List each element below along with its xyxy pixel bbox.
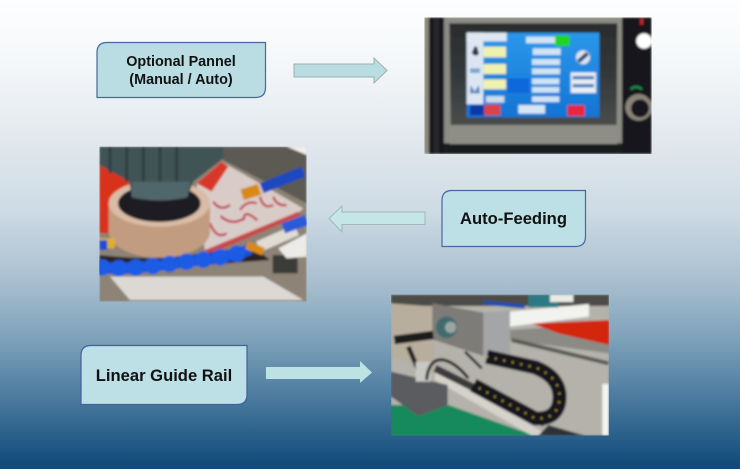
callout: Linear Guide Rail — [81, 346, 247, 404]
callout: Optional Pannel: Optional Pannel — [126, 54, 236, 70]
photo: auto-feeding router head — [99, 147, 307, 302]
arrow: panel to photo — [294, 58, 387, 83]
callout: Auto-Feeding — [442, 190, 586, 246]
callout: Linear Guide Rail: Linear Guide Rail — [96, 366, 232, 385]
callout: Optional Pannel: (Manual / Auto) — [129, 72, 233, 88]
arrow: auto-feeding to photo — [329, 206, 425, 232]
photo: touch control panel — [424, 17, 652, 154]
callout: Auto-Feeding: Auto-Feeding — [460, 209, 567, 228]
photo: linear guide rail and cable chain — [391, 295, 609, 436]
arrow: rail to photo — [266, 361, 372, 383]
callout: Optional Pannel — [97, 42, 266, 98]
